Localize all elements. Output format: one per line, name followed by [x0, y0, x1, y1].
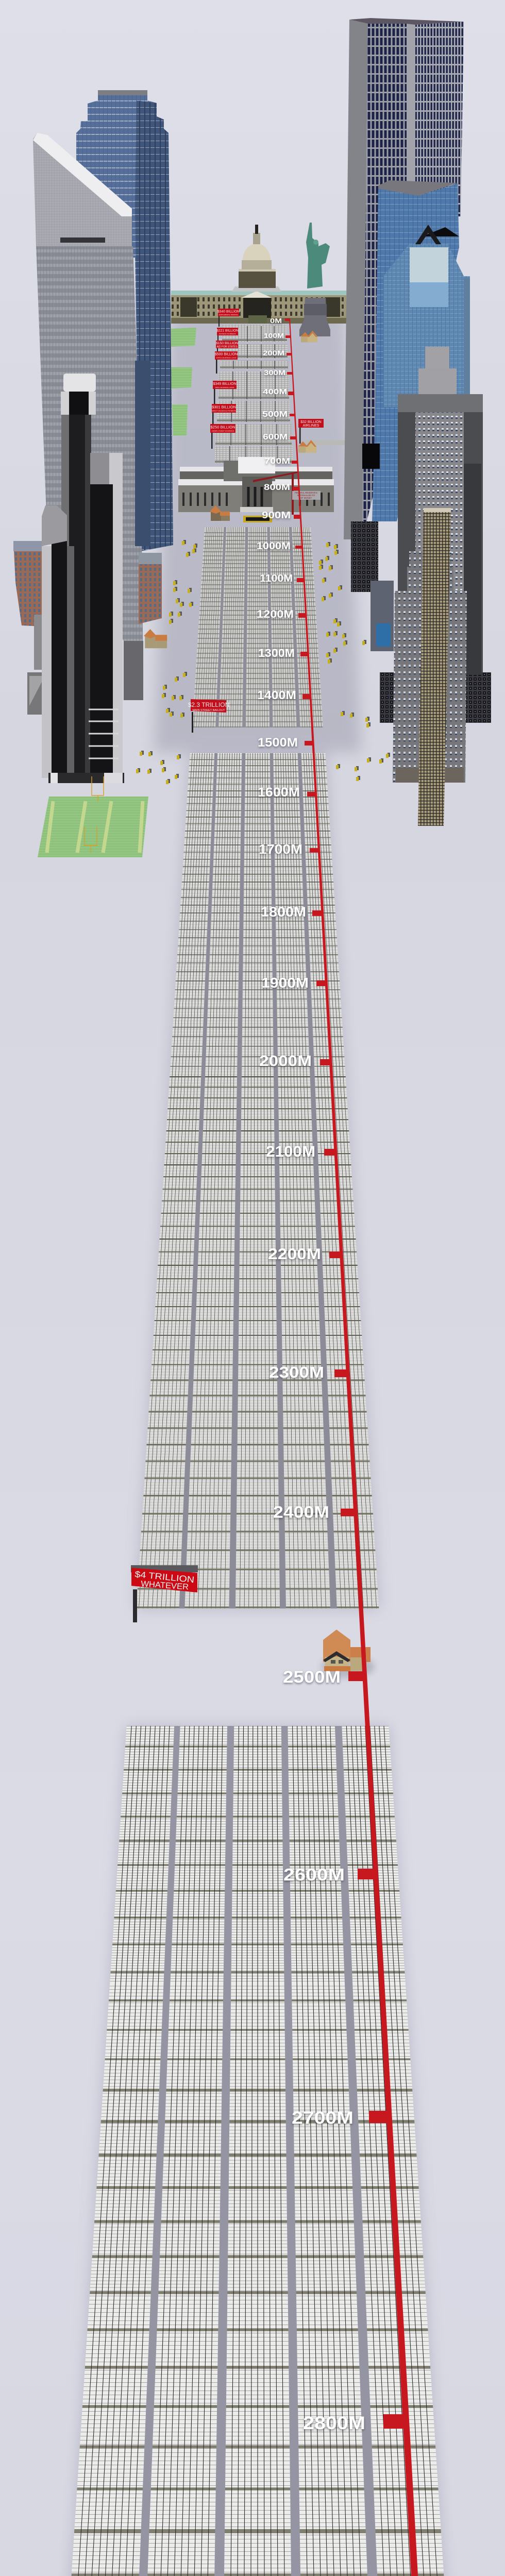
brownstone buildings left	[13, 541, 162, 715]
billboard: $250 billion: UNEMPLOYMENT INSURANCE	[212, 430, 234, 432]
distance labels: 2000M	[259, 1053, 312, 1070]
billboard: $2.3 trillion main street bailout: MAIN STREET BAILOUT	[193, 709, 225, 712]
building: tall dark-window tower	[344, 18, 464, 539]
billboard: $4 trillion whatever	[131, 1565, 198, 1622]
money field 3: 2500M to 2900M	[71, 1726, 444, 2576]
billboard: $4 trillion whatever: WHATEVER	[141, 1580, 189, 1591]
distance labels: 1100M	[260, 573, 293, 584]
billboard: $2.3 trillion main street bailout	[188, 699, 229, 733]
tick marks on the distance line	[285, 318, 461, 2576]
billboard: $301 billion: $301 BILLION	[212, 405, 236, 409]
billboard: $340 billion: SUPPLEMENTAL SPENDING	[219, 314, 238, 316]
distance labels: 1300M	[258, 647, 295, 659]
money field 2: 1500M to 2400M	[137, 753, 379, 1608]
distance labels: 2700M	[292, 2108, 354, 2128]
distance labels: 1400M	[257, 688, 296, 702]
billboard: $500 billion: STATE & BUSINESS LOANS	[216, 357, 237, 359]
distance labels: 1200M	[257, 608, 294, 620]
distance labels: 600M	[263, 433, 288, 442]
building: black tower front left	[42, 374, 124, 783]
distance labels: 1800M	[261, 904, 306, 920]
dark office block and square buildings	[351, 464, 491, 723]
billboard: $500 billion: $500 BILLION	[215, 352, 238, 357]
distance labels	[257, 317, 382, 2576]
billboard: $150 billion	[216, 341, 238, 352]
distance labels: 1500M	[258, 736, 298, 750]
distance labels: 500M	[262, 410, 288, 419]
billboard: $340 billion: $340 BILLION	[217, 310, 240, 313]
distance labels: 2400M	[273, 1503, 329, 1521]
small pit near federal reserve	[243, 516, 272, 522]
billboard: $150 billion: AID FOR STATES	[216, 345, 238, 348]
billboard: $2.3 trillion main street bailout: $2.3 TRILLION	[188, 701, 229, 708]
billboard: $4 trillion whatever: $4 TRILLION	[134, 1569, 195, 1585]
money field 1: 900M to 1500M	[193, 527, 323, 727]
money field 4: 2900M to 3KM	[0, 515, 505, 2576]
billboard: $349 billion: SMALL BUSINESS LOANS	[215, 386, 234, 388]
billboard: $32 billion airlines: AIRLINES	[303, 424, 319, 428]
billboard: $150 billion: $150 BILLION	[216, 342, 238, 345]
federal reserve sign	[292, 491, 321, 500]
building: grey wedge tower	[33, 133, 150, 699]
red distance line	[289, 319, 462, 2576]
distance labels: 800M	[264, 482, 290, 492]
building: stepped stone tower front	[393, 551, 467, 783]
distance labels: 1600M	[258, 785, 300, 800]
distance labels: 900M	[262, 510, 291, 520]
distance labels: 300M	[264, 368, 285, 377]
billboard: $250 billion: $250 BILLION	[210, 425, 235, 430]
distance labels: 700M	[264, 457, 290, 466]
houses	[144, 331, 317, 648]
distance labels: 100M	[264, 332, 284, 340]
distance labels: 2300M	[269, 1363, 324, 1381]
forklifts scattered	[136, 540, 390, 784]
billboard: $301 billion	[212, 404, 236, 425]
billboard: $32 billion airlines: $32 BILLION	[300, 420, 322, 424]
money strips 0 to 700M	[215, 325, 293, 463]
billboard: $250 billion	[210, 424, 235, 449]
billboard: $349 billion: $349 BILLION	[213, 381, 237, 386]
distance labels: 1700M	[259, 841, 302, 857]
football field	[38, 776, 148, 857]
billboard: $500 billion	[215, 351, 238, 374]
billboard: $349 billion	[213, 381, 237, 404]
distance labels: 2100M	[266, 1143, 315, 1160]
distance labels: 200M	[263, 349, 284, 357]
federal reserve sign: FEDERAL RESERVE'S	[295, 492, 317, 494]
distance labels: 1900M	[261, 975, 309, 991]
distance labels: 0M	[270, 317, 282, 325]
building: thin beige tower	[418, 508, 451, 826]
building: grey deco block back right	[398, 347, 483, 714]
statue of liberty	[299, 223, 330, 336]
distance labels: 2600M	[283, 1865, 345, 1884]
distance labels: 1000M	[257, 541, 291, 552]
billboard: $32 billion airlines	[298, 419, 324, 444]
billboard: $301 billion: DIRECT HOUSEHOLD PAYMENTS	[212, 410, 236, 412]
billboard: $221 billion: $221 BILLION	[216, 329, 239, 333]
distance labels: 2200M	[268, 1246, 321, 1263]
distance labels: 2500M	[283, 1668, 341, 1686]
stacked money strip behind airlines sign	[304, 440, 345, 445]
distance labels: 2800M	[303, 2413, 365, 2433]
federal reserve sign: NATIONALIZE PIT	[297, 494, 315, 497]
billboard: $221 billion: BUSINESS TAX BREAKS	[219, 333, 236, 335]
federal reserve sign: OF MONEY	[300, 497, 312, 499]
building: light blue peaked tower	[383, 225, 483, 412]
small football fields	[171, 328, 196, 436]
building: blue curved tower	[362, 180, 459, 521]
federal reserve building	[178, 457, 334, 515]
distance labels: 400M	[263, 387, 287, 396]
house near 2500M	[321, 1630, 375, 1678]
billboard: $221 billion	[216, 328, 239, 341]
billboard: $340 billion	[217, 309, 240, 327]
building: blue tiered tower	[76, 90, 173, 551]
capitol building	[171, 225, 346, 324]
